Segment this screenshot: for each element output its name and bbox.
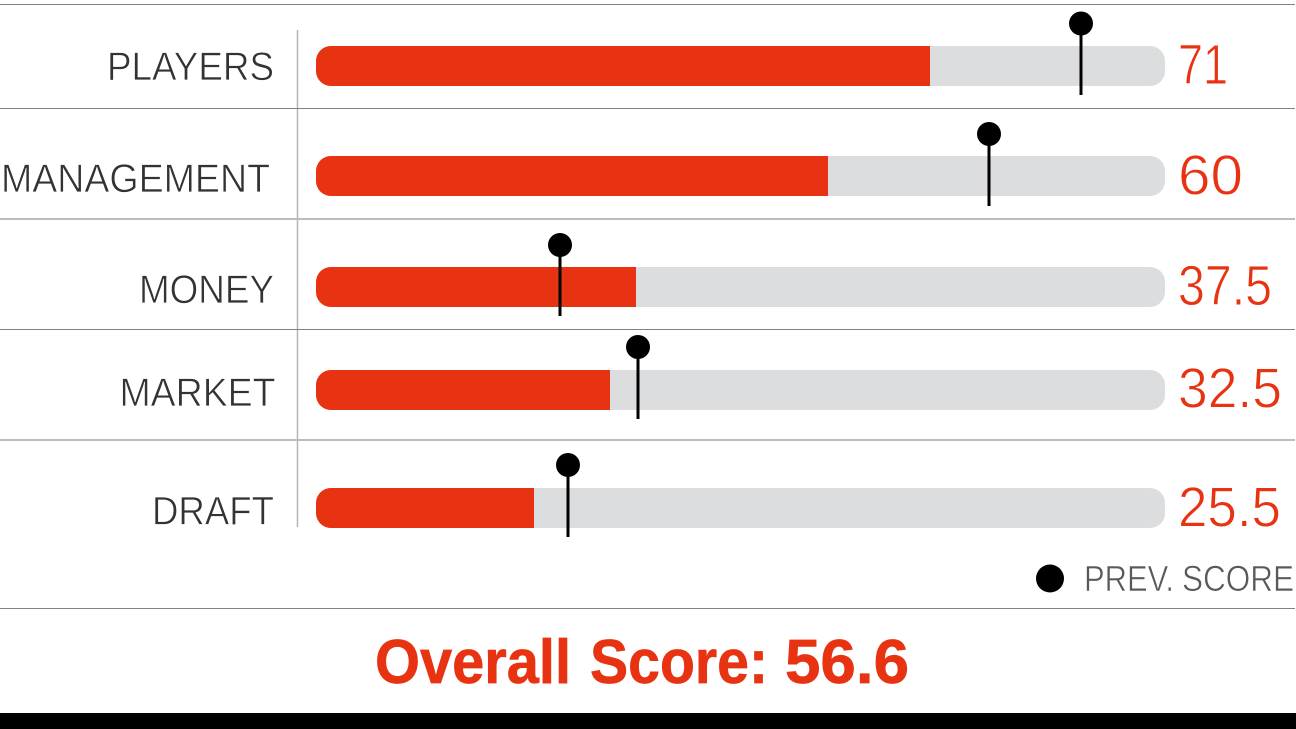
value: players: 71 [1178,33,1228,97]
row: draft [152,453,1281,540]
bar: money score [316,267,636,307]
marker: market previous score [626,335,650,419]
label: management: MANAGEMENT [1,157,270,201]
track: players [316,46,1165,86]
bar: players score [316,46,930,86]
row: players [107,12,1228,97]
marker: draft previous score [556,453,580,537]
row: management [1,122,1243,208]
bar: management score [316,156,828,196]
label: market: MARKET [120,371,276,415]
track: market [316,370,1165,410]
label: money: MONEY [139,268,274,312]
legend: previous score [1036,558,1294,599]
label: draft: DRAFT [152,490,274,534]
overall score: 56.6 [785,628,909,697]
marker: money previous score [548,233,572,316]
track: money [316,267,1165,307]
marker: management previous score [977,122,1001,206]
bar: draft score [316,488,534,528]
label: players: PLAYERS [107,45,274,89]
overall score: Overall [375,628,571,697]
marker: players previous score [1069,12,1093,95]
value: draft: 25.5 [1178,476,1281,540]
value: money: 37.5 [1178,254,1272,318]
row: money [139,233,1272,318]
bar: market score [316,370,610,410]
row: market [120,335,1282,420]
value: management: 60 [1178,144,1243,208]
track: management [316,156,1165,196]
legend label: PREV. [1084,558,1174,599]
value: market: 32.5 [1178,356,1282,420]
overall score: Score: [590,628,768,697]
overall score [375,628,909,697]
bottom black bar [0,713,1296,729]
track: draft [316,488,1165,528]
legend label [1084,558,1294,599]
legend marker [1036,564,1064,592]
